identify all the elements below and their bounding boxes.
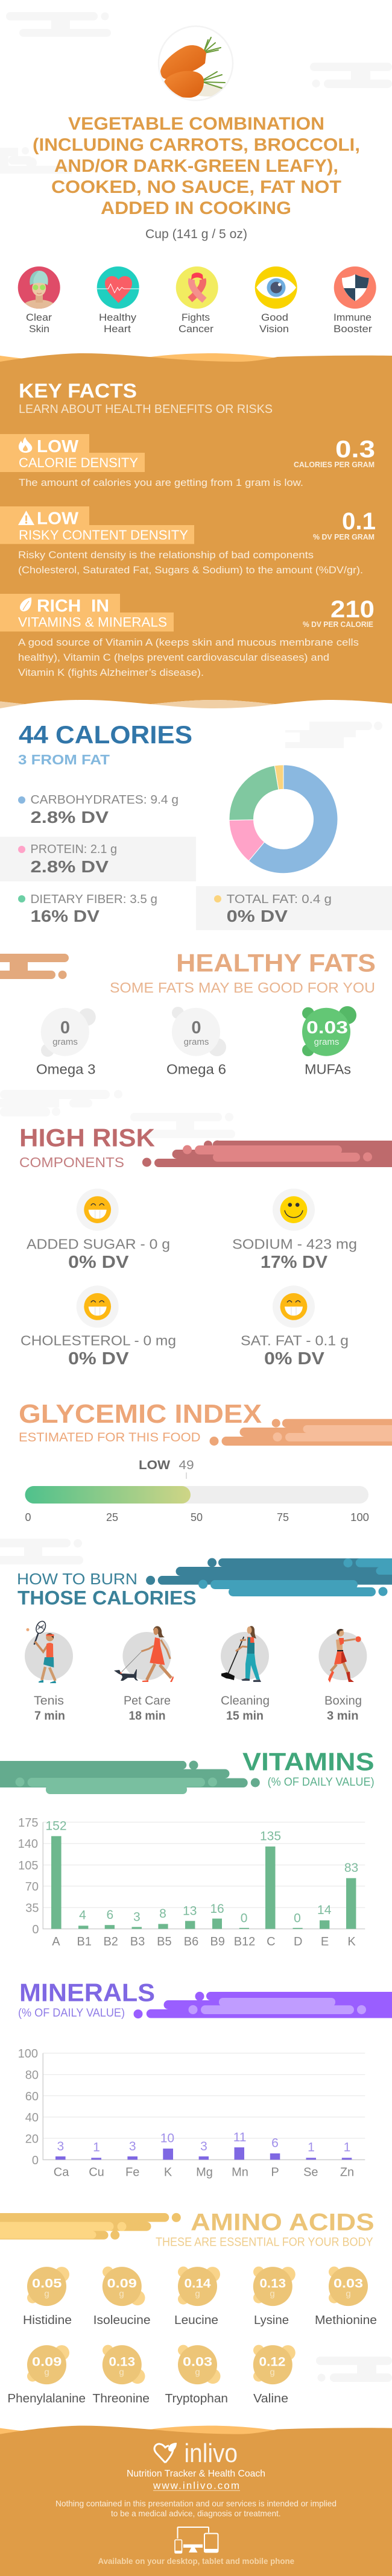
subheading: LEARN ABOUT HEALTH BENEFITS OR RISKS <box>19 403 273 416</box>
stat: isoleucine: Isoleucine <box>93 2314 151 2327</box>
decorative banner <box>210 1419 392 1446</box>
bar chart: vitamins: 152 <box>45 1819 67 1833</box>
label: RISKY CONTENT DENSITY <box>19 527 188 543</box>
stat: tryptophan <box>165 2345 228 2405</box>
bar chart: vitamins: 0 <box>32 1923 39 1936</box>
gauge axis: 50 <box>191 1511 203 1523</box>
item: sodium <box>232 1189 357 1272</box>
legend: protein: PROTEIN: 2.1 g <box>30 843 117 856</box>
legend: protein: 2.8% DV <box>30 857 109 876</box>
stat: leucine: g <box>195 2289 200 2299</box>
heading: THOSE CALORIES <box>17 1587 197 1608</box>
stat: mufas <box>302 1006 356 1077</box>
fact: calorie density <box>0 434 375 488</box>
benefit label <box>259 312 289 335</box>
stat: leucine: 0.14 <box>185 2277 211 2291</box>
stat: isoleucine: g <box>119 2289 124 2299</box>
tagline: Nutrition Tracker & Health Coach <box>127 2469 265 2479</box>
gauge axis: 100 <box>350 1511 369 1523</box>
icon: laughing face <box>77 1189 119 1231</box>
bar chart: vitamins: 16 <box>210 1902 224 1916</box>
bar chart: minerals: 6 <box>271 2136 279 2150</box>
disclaimer <box>55 2498 337 2518</box>
stat: histidine: 0.05 <box>32 2277 62 2291</box>
bar chart: minerals: P <box>271 2166 279 2179</box>
label: LOW <box>37 509 79 529</box>
icon: smiling face <box>273 1189 315 1231</box>
disclaimer: to be a medical advice, diagnosis or treatment. <box>111 2508 281 2518</box>
decorative cloud top left <box>6 12 111 37</box>
bar chart: minerals: Mn <box>232 2166 248 2179</box>
bar chart: vitamins: 70 <box>25 1880 39 1894</box>
bar chart: vitamins <box>18 1816 365 1948</box>
subheading: COMPONENTS <box>19 1154 124 1170</box>
website link: www.inlivo.com <box>153 2480 239 2491</box>
bar chart: minerals: Cu <box>89 2166 104 2179</box>
decorative banner <box>0 2213 181 2240</box>
benefit label: Clear <box>26 312 52 323</box>
item: cholesterol <box>21 1285 176 1368</box>
bar chart: minerals: Zn <box>340 2166 354 2179</box>
bar chart: minerals: 0 <box>32 2154 39 2167</box>
value: 210 <box>330 596 375 623</box>
description: (Cholesterol, Saturated Fat, Sugars & Sodium) to the amount (%DV/gr). <box>18 564 363 576</box>
benefit: clear skin <box>18 266 60 309</box>
title <box>33 114 360 218</box>
value: 0.3 <box>335 436 375 463</box>
bar chart: vitamins: B12 <box>234 1935 255 1948</box>
food photo: carrots <box>159 27 233 100</box>
bar chart: vitamins: B9 <box>210 1935 225 1948</box>
legend: dietary fiber <box>18 893 157 925</box>
description: healthy), Vitamin C (helps prevent cardiovascular diseases) and <box>18 652 329 663</box>
bar chart: vitamins: B3 <box>130 1935 145 1948</box>
stat: histidine: g <box>44 2289 49 2299</box>
bar chart: minerals: 3 <box>57 2140 64 2153</box>
benefit label <box>99 312 137 335</box>
bar chart: vitamins: 8 <box>159 1907 166 1921</box>
panel: high risk components <box>0 1090 392 1368</box>
decorative clouds <box>0 1090 235 1138</box>
donut chart <box>229 765 338 874</box>
bar chart: vitamins: C <box>267 1935 276 1948</box>
stat: phenylalanine: Phenylalanine <box>7 2392 86 2405</box>
legend: carbohydrates: 2.8% DV <box>30 808 109 827</box>
subheading: 3 FROM FAT <box>18 752 110 767</box>
item: added sugar: ADDED SUGAR - 0 g <box>27 1236 170 1252</box>
bar chart: vitamins: 175 <box>18 1816 39 1830</box>
subheading: ESTIMATED FOR THIS FOOD <box>19 1431 200 1444</box>
bar chart: vitamins: B6 <box>184 1935 198 1948</box>
logo: inlivo <box>185 2439 238 2468</box>
heading: HIGH RISK <box>19 1124 155 1152</box>
subheading: SOME FATS MAY BE GOOD FOR YOU <box>110 980 375 997</box>
stat: omega 3 <box>36 1008 96 1077</box>
gauge label: LOW <box>139 1458 170 1472</box>
serving size: Cup (141 g / 5 oz) <box>145 227 247 241</box>
panel: calories <box>0 720 392 930</box>
decorative banner <box>146 1558 392 1596</box>
icon: laughing face <box>273 1285 315 1327</box>
unit: % DV PER GRAM <box>313 532 375 541</box>
bar chart: vitamins: 83 <box>344 1861 358 1875</box>
item: added sugar <box>27 1189 170 1272</box>
panel: healthy fats <box>0 949 376 1077</box>
activity: tennis <box>25 1620 73 1723</box>
panel: hero header <box>0 12 392 335</box>
benefit: healthy heart <box>97 266 139 309</box>
benefit: good vision <box>255 266 297 309</box>
stat: histidine <box>23 2267 72 2327</box>
icon: devices <box>175 2527 218 2554</box>
benefit label: Cancer <box>179 323 213 335</box>
activity: pet care: 18 min <box>129 1710 165 1723</box>
stat: phenylalanine <box>7 2345 86 2405</box>
decorative cloud <box>316 2357 392 2382</box>
bar chart: vitamins: 4 <box>79 1909 86 1923</box>
bar chart: vitamins: 0 <box>294 1912 301 1926</box>
benefit: immune booster <box>334 266 376 309</box>
panel: glycemic index <box>19 1399 392 1523</box>
panel: amino acids <box>0 2209 392 2405</box>
stat: omega 3: grams <box>52 1037 78 1047</box>
label: RICH IN <box>37 597 109 616</box>
stat: omega 6 <box>166 1007 226 1077</box>
benefit label: Vision <box>259 323 289 335</box>
gauge axis: 0 <box>25 1511 31 1523</box>
decorative banner <box>0 954 69 979</box>
bar chart: minerals: 100 <box>18 2047 38 2061</box>
benefit label: Good <box>261 312 288 323</box>
legend: dietary fiber: DIETARY FIBER: 3.5 g <box>30 893 157 906</box>
subheading: (% OF DAILY VALUE) <box>268 1776 375 1789</box>
legend: total fat <box>196 886 392 930</box>
bar chart: minerals: 3 <box>200 2140 207 2153</box>
activity: cleaning: 15 min <box>226 1710 264 1723</box>
stat: omega 6: Omega 6 <box>166 1062 226 1077</box>
unit: % DV PER CALORIE <box>303 620 373 629</box>
bar chart: vitamins: 35 <box>25 1901 39 1915</box>
stat: valine <box>253 2345 296 2405</box>
description: A good source of Vitamin A (keeps skin and mucous membrane cells <box>18 637 359 648</box>
heading: HEALTHY FATS <box>176 949 376 977</box>
stat: lysine: Lysine <box>254 2314 289 2327</box>
bar chart: vitamins: B5 <box>157 1935 172 1948</box>
stat: isoleucine: 0.09 <box>107 2277 137 2291</box>
gauge marker <box>186 1472 187 1479</box>
benefit label: Fights <box>182 312 210 323</box>
icon: flame <box>19 437 32 453</box>
title: VEGETABLE COMBINATION <box>68 114 324 134</box>
item: added sugar: 0% DV <box>68 1253 129 1272</box>
bar chart: minerals: 20 <box>25 2133 39 2146</box>
availability note: Available on your desktop, tablet and mobile phone <box>98 2556 294 2566</box>
activity: cleaning: Cleaning <box>221 1694 270 1707</box>
stat: methionine: g <box>346 2289 351 2299</box>
stat: methionine: Methionine <box>315 2314 377 2327</box>
legend: total fat: TOTAL FAT: 0.4 g <box>227 893 332 906</box>
stat: valine: Valine <box>253 2392 288 2405</box>
decorative banner <box>142 1141 392 1167</box>
decorative cloud left behind title <box>0 147 72 174</box>
stat: mufas: MUFAs <box>305 1062 351 1077</box>
stat: omega 6: 0 <box>191 1018 201 1038</box>
stat: histidine: Histidine <box>23 2314 72 2327</box>
unit: CALORIES PER GRAM <box>294 460 375 469</box>
bar chart: vitamins: 0 <box>241 1912 247 1926</box>
icon: woman walking dog <box>114 1626 174 1682</box>
heading: 44 CALORIES <box>19 720 192 749</box>
bar chart: minerals: 1 <box>308 2141 315 2155</box>
activity: pet care: Pet Care <box>124 1694 171 1707</box>
description <box>18 637 359 678</box>
item: cholesterol: 0% DV <box>68 1349 129 1368</box>
bar chart: vitamins: K <box>347 1935 356 1948</box>
bar chart: vitamins: E <box>321 1935 329 1948</box>
activity: boxing: 3 min <box>327 1710 358 1723</box>
heading: VITAMINS <box>242 1747 375 1775</box>
bar chart: minerals: 1 <box>344 2141 350 2155</box>
stat: lysine: 0.13 <box>259 2277 286 2291</box>
item: sodium: 17% DV <box>261 1253 328 1272</box>
stat: leucine: Leucine <box>174 2314 218 2327</box>
title: AND/OR DARK-GREEN LEAFY), <box>54 156 338 176</box>
stat: tryptophan: 0.03 <box>183 2355 212 2369</box>
bar chart: minerals: 10 <box>160 2132 174 2146</box>
benefit label <box>26 312 52 335</box>
stat: phenylalanine: 0.09 <box>32 2355 62 2369</box>
icon: tennis player <box>27 1620 56 1683</box>
bar chart: minerals: 11 <box>233 2130 247 2144</box>
bar chart: vitamins: 3 <box>133 1910 141 1924</box>
panel: vitamins <box>0 1747 375 1948</box>
heading: HOW TO BURN <box>17 1570 138 1588</box>
bar chart: minerals <box>18 2047 365 2179</box>
label: VITAMINS & MINERALS <box>18 615 167 630</box>
bar chart: minerals: 1 <box>93 2141 100 2155</box>
stat: omega 6: grams <box>184 1037 209 1047</box>
heading: AMINO ACIDS <box>191 2209 375 2235</box>
bar chart: vitamins: 6 <box>107 1908 113 1922</box>
stat: mufas: 0.03 <box>306 1018 348 1038</box>
legend: carbohydrates: CARBOHYDRATES: 9.4 g <box>30 793 179 807</box>
stat: threonine: 0.13 <box>109 2355 135 2369</box>
decorative cloud right <box>310 63 392 88</box>
gauge axis: 75 <box>277 1511 289 1523</box>
bar chart: vitamins: 13 <box>183 1904 197 1918</box>
stat: valine: 0.12 <box>259 2355 286 2369</box>
heading: GLYCEMIC INDEX <box>19 1399 262 1429</box>
icon: leaf <box>20 597 31 611</box>
activity: pet care <box>114 1626 174 1723</box>
icon: person sweeping <box>221 1626 261 1682</box>
activity: boxing <box>318 1629 367 1723</box>
stat: threonine: g <box>119 2367 124 2378</box>
bar chart: minerals: Mg <box>196 2166 213 2179</box>
stat: lysine: g <box>270 2289 275 2299</box>
description <box>18 549 363 576</box>
bar chart: minerals: 3 <box>129 2140 136 2153</box>
bar chart: minerals: 80 <box>25 2069 39 2082</box>
stat: tryptophan: Tryptophan <box>165 2392 228 2405</box>
activity: tennis: Tenis <box>34 1694 64 1707</box>
panel: how to burn those calories <box>0 1538 392 1723</box>
stat: lysine <box>253 2267 296 2327</box>
bar chart: minerals: Se <box>303 2166 318 2179</box>
benefit label: Immune <box>334 312 371 323</box>
bar chart: vitamins: D <box>294 1935 302 1948</box>
stat: valine: g <box>270 2367 275 2378</box>
icon: boxer <box>328 1629 361 1683</box>
item: sodium: SODIUM - 423 mg <box>232 1236 357 1252</box>
stat: threonine: Threonine <box>92 2392 150 2405</box>
subheading: THESE ARE ESSENTIAL FOR YOUR BODY <box>156 2236 373 2249</box>
stat: omega 3: Omega 3 <box>36 1062 95 1077</box>
bar chart: minerals: 40 <box>25 2111 39 2124</box>
bar chart: vitamins: A <box>52 1935 60 1948</box>
bar chart: vitamins: B2 <box>103 1935 118 1948</box>
description: The amount of calories you are getting from 1 gram is low. <box>19 477 303 488</box>
label: CALORIE DENSITY <box>19 455 138 470</box>
bar chart: minerals: K <box>164 2166 172 2179</box>
stat: threonine <box>92 2345 150 2405</box>
item: saturated fat: SAT. FAT - 0.1 g <box>241 1333 349 1349</box>
gauge label <box>139 1458 194 1472</box>
stat: phenylalanine: g <box>44 2367 49 2378</box>
decorative cloud <box>0 1538 83 1564</box>
gauge axis: 25 <box>106 1511 118 1523</box>
heading: MINERALS <box>19 1978 155 2006</box>
title: ADDED IN COOKING <box>101 198 291 218</box>
benefit label: Healthy <box>99 312 137 323</box>
stat: leucine <box>174 2267 220 2327</box>
fact: risky content density <box>0 506 376 576</box>
gauge bar <box>25 1486 368 1504</box>
bar chart: vitamins: 14 <box>317 1903 332 1917</box>
bar chart: vitamins: 140 <box>18 1838 38 1851</box>
item: saturated fat: 0% DV <box>264 1349 325 1368</box>
stat: methionine <box>315 2267 377 2327</box>
activity: boxing: Boxing <box>324 1694 362 1707</box>
benefit: fights cancer <box>176 266 218 309</box>
decorative banner <box>0 1760 260 1794</box>
stat: methionine: 0.03 <box>334 2277 363 2291</box>
benefit label: Skin <box>29 323 49 335</box>
logo <box>154 2439 238 2468</box>
bar chart: minerals: Ca <box>54 2166 69 2179</box>
bar chart: vitamins: 105 <box>18 1859 39 1872</box>
value: 0.1 <box>342 508 376 535</box>
benefit label <box>334 312 372 335</box>
stat: tryptophan: g <box>195 2367 200 2378</box>
activity: cleaning <box>221 1626 270 1723</box>
legend: protein <box>0 837 196 881</box>
decorative banner <box>134 1992 392 2018</box>
decorative cloud <box>285 722 382 748</box>
panel: footer <box>0 2426 392 2576</box>
bar chart: minerals: 60 <box>25 2090 39 2103</box>
disclaimer: Nothing contained in this presentation and our services is intended or implied <box>55 2498 337 2508</box>
icon: warning <box>18 511 34 525</box>
description: Vitamin K (fights Alzheimer’s disease). <box>18 667 204 678</box>
benefit label <box>179 312 213 335</box>
bar chart: minerals: Fe <box>125 2166 139 2179</box>
benefit label: Booster <box>334 323 372 335</box>
legend: carbohydrates <box>18 793 179 827</box>
stat: isoleucine <box>93 2267 151 2327</box>
bar chart: vitamins: B1 <box>77 1935 92 1948</box>
title: COOKED, NO SAUCE, FAT NOT <box>51 177 341 197</box>
stat: mufas: grams <box>314 1037 339 1047</box>
label: LOW <box>37 437 79 456</box>
heading: KEY FACTS <box>19 380 137 402</box>
benefit label: Heart <box>104 323 131 335</box>
subheading: (% OF DAILY VALUE) <box>18 2007 125 2020</box>
gauge label: 49 <box>179 1458 194 1472</box>
icon: laughing face <box>77 1285 119 1327</box>
bar chart: vitamins: 135 <box>260 1829 281 1844</box>
item: saturated fat <box>241 1285 349 1368</box>
item: cholesterol: CHOLESTEROL - 0 mg <box>21 1333 176 1349</box>
legend: total fat: 0% DV <box>227 907 288 925</box>
gauge axis <box>25 1511 369 1523</box>
legend: dietary fiber: 16% DV <box>30 907 100 925</box>
panel: key facts <box>0 353 392 708</box>
fact: vitamins and minerals <box>0 594 375 678</box>
stat: omega 3: 0 <box>60 1018 70 1038</box>
panel: minerals <box>18 1978 392 2179</box>
description: Risky Content density is the relationship of bad components <box>18 549 314 561</box>
activity: tennis: 7 min <box>34 1710 65 1723</box>
title: (INCLUDING CARROTS, BROCCOLI, <box>33 135 360 155</box>
